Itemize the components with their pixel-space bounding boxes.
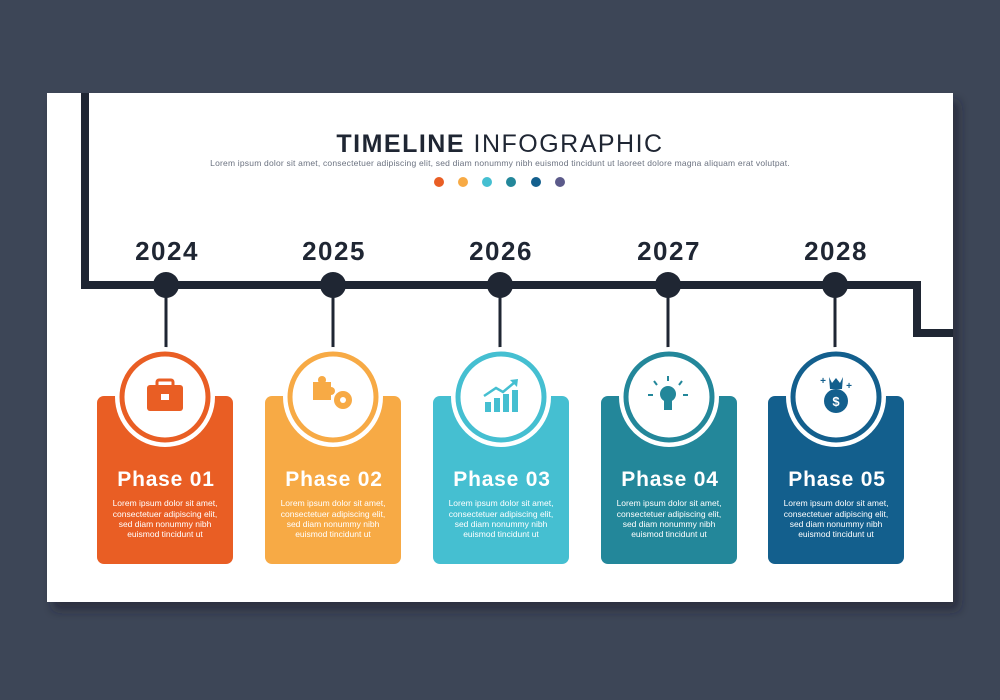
- phase 01: consectetuer adipiscing elit,: [113, 509, 217, 519]
- icon: money bag: +: [846, 381, 852, 392]
- icon: growth chart: [484, 379, 518, 412]
- phase 05: Phase 05: [788, 468, 886, 491]
- phase 04: sed diam nonummy nibh: [623, 519, 716, 529]
- years: 2025: [302, 236, 366, 266]
- phase 04: Phase 04: [621, 468, 719, 491]
- phase 04: [601, 272, 737, 564]
- years: 2027: [637, 236, 701, 266]
- phase 04: Lorem ipsum dolor sit amet,: [617, 498, 721, 508]
- years: [135, 236, 868, 266]
- phase 04: consectetuer adipiscing elit,: [617, 509, 721, 519]
- subtitle: Lorem ipsum dolor sit amet, consectetuer adipiscing elit, sed diam nonummy nibh euismod tincidunt ut laoreet dolore magna aliquam erat volutpat.: [210, 158, 790, 168]
- phase 02: euismod tincidunt ut: [295, 529, 371, 539]
- phase 02: consectetuer adipiscing elit,: [281, 509, 385, 519]
- phase 05: consectetuer adipiscing elit,: [784, 509, 888, 519]
- phase 01: sed diam nonummy nibh: [119, 519, 212, 529]
- phase 05: [768, 272, 904, 564]
- phase 01: Phase 01: [117, 468, 215, 491]
- icon: money bag: $: [832, 394, 840, 409]
- icon: light bulb: [648, 376, 688, 410]
- icon: money bag: [820, 376, 852, 413]
- timeline line: [85, 93, 953, 333]
- years: 2026: [469, 236, 533, 266]
- years: 2028: [804, 236, 868, 266]
- color dots: [434, 177, 565, 187]
- phase 03: Lorem ipsum dolor sit amet,: [449, 498, 553, 508]
- phase 03: Phase 03: [453, 468, 551, 491]
- icon: briefcase: [147, 380, 183, 411]
- phase 01: euismod tincidunt ut: [127, 529, 203, 539]
- phase 04: euismod tincidunt ut: [631, 529, 707, 539]
- panel: white background: [47, 93, 953, 602]
- icon: money bag: +: [820, 376, 826, 387]
- phase 03: [433, 272, 569, 564]
- phase 03: sed diam nonummy nibh: [455, 519, 548, 529]
- icon: puzzle gears: [313, 376, 352, 409]
- phase 05: euismod tincidunt ut: [798, 529, 874, 539]
- phase 02: [265, 272, 401, 564]
- title: TIMELINE INFOGRAPHIC: [336, 130, 664, 158]
- phase 02: Phase 02: [285, 468, 383, 491]
- phase 01: Lorem ipsum dolor sit amet,: [113, 498, 217, 508]
- phase 02: Lorem ipsum dolor sit amet,: [281, 498, 385, 508]
- phase 05: Lorem ipsum dolor sit amet,: [784, 498, 888, 508]
- years: 2024: [135, 236, 199, 266]
- phase 03: consectetuer adipiscing elit,: [449, 509, 553, 519]
- phase 02: sed diam nonummy nibh: [287, 519, 380, 529]
- phase 03: euismod tincidunt ut: [463, 529, 539, 539]
- phase 05: sed diam nonummy nibh: [790, 519, 883, 529]
- phase 01: [97, 272, 233, 564]
